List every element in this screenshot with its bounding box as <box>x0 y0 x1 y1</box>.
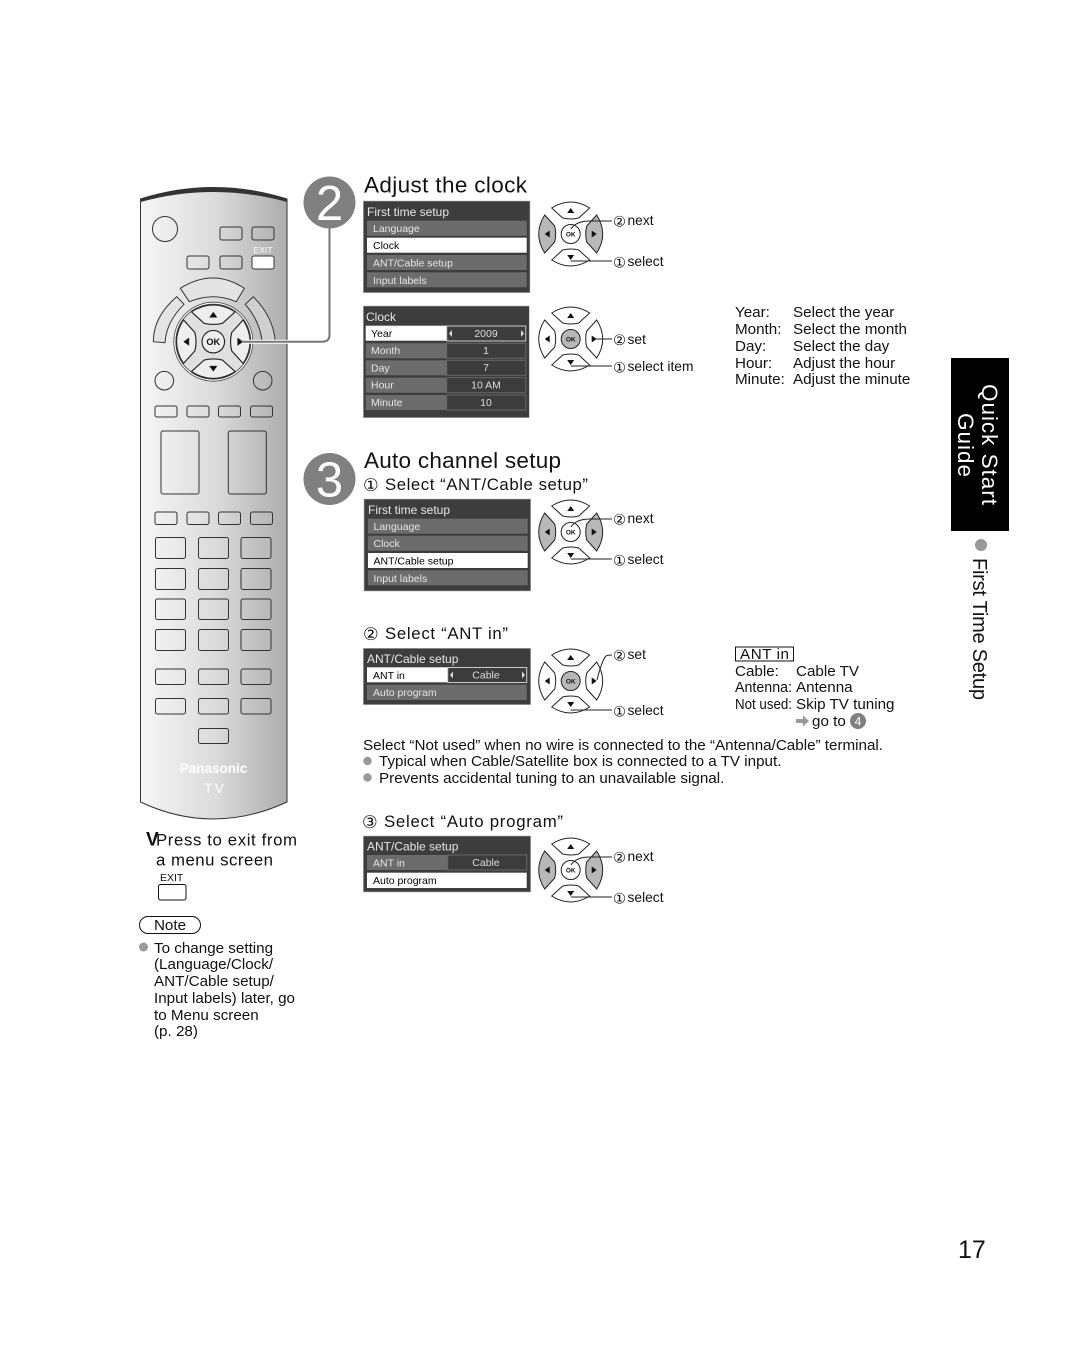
remote brand: Panasonic <box>180 761 248 776</box>
ant in legend: Cable TV <box>796 663 860 680</box>
menu: ant cable setup ant in: Auto program <box>373 687 437 699</box>
ant in legend: go to <box>812 713 846 730</box>
remote pad: set and select 3: ① <box>613 704 626 720</box>
notes on ant in: Select “Not used” when no wire is connected to the “Antenna/Cable” terminal. <box>363 737 883 754</box>
remote control <box>140 188 287 819</box>
connector from step 2 to remote <box>242 226 330 342</box>
ant in legend: Antenna <box>796 679 853 696</box>
menu: clock: 2009 <box>474 328 498 340</box>
menu: clock: 1 <box>483 345 489 357</box>
exit instruction: Press to exit from <box>156 830 297 850</box>
note text <box>139 940 295 1040</box>
clock legend: Month: <box>735 321 781 338</box>
remote pad: set and select item <box>539 307 693 376</box>
menu: first time setup ant cable: Language <box>374 521 420 533</box>
remote pad: next and select: next <box>628 213 654 228</box>
remote pad: set and select item: set <box>628 332 646 347</box>
step badge 2: 2 <box>316 177 343 231</box>
clock legend: Minute: <box>735 371 785 388</box>
substep 2 heading: ② <box>363 625 379 645</box>
menu: clock: Month <box>371 345 400 357</box>
menu: ant cable setup ant in <box>363 648 531 705</box>
menu: clock: Year <box>371 328 393 340</box>
remote pad: set and select item: OK <box>566 336 576 344</box>
clock legend: Year: <box>735 304 770 321</box>
ant in legend: ANT in <box>740 646 789 663</box>
ant in legend: Skip TV tuning <box>796 696 894 713</box>
remote pad: next and select 4: ① <box>613 892 626 908</box>
menu: first time setup clock <box>363 201 530 293</box>
remote pad: set and select item: ① <box>613 360 626 376</box>
remote pad: set and select 3: select <box>628 703 664 718</box>
note text: (Language/Clock/ <box>154 956 274 973</box>
notes on ant in: Typical when Cable/Satellite box is connected to a TV input. <box>379 753 781 770</box>
exit instruction: EXIT <box>160 872 184 884</box>
remote pad: next and select: ② <box>613 214 626 230</box>
remote pad: next and select 2 <box>539 500 664 570</box>
exit instruction: V <box>146 830 159 850</box>
notes on ant in <box>363 737 883 787</box>
menu: ant cable setup auto program: Cable <box>472 857 500 869</box>
menu: clock: Clock <box>366 310 397 324</box>
menu: first time setup ant cable <box>364 499 531 591</box>
menu: ant cable setup ant in: Cable <box>472 670 500 682</box>
clock legend: Hour: <box>735 355 772 372</box>
remote pad: next and select 4 <box>539 838 664 908</box>
clock legend: Adjust the minute <box>793 371 910 388</box>
substep 3 heading: Select “Auto program” <box>384 812 563 831</box>
note pill <box>140 916 200 934</box>
menu: clock: 7 <box>483 362 489 374</box>
menu: first time setup ant cable: ANT/Cable setup <box>374 556 454 568</box>
ant in legend: 4 <box>855 714 862 728</box>
menu: clock <box>363 306 529 418</box>
remote pad: next and select: OK <box>566 232 576 238</box>
colour buttons <box>155 406 272 417</box>
step badge 3 <box>304 453 356 508</box>
remote pad: set and select item: ② <box>613 333 626 349</box>
note text: ANT/Cable setup/ <box>154 973 275 990</box>
step badge 3: 3 <box>316 454 343 508</box>
menu: clock: Hour <box>371 380 394 392</box>
substep 3 heading: ③ <box>362 813 378 833</box>
sidebar label: first time setup: First Time Setup <box>968 558 990 700</box>
page number: 17 <box>958 1236 986 1264</box>
remote pad: next and select 2: select <box>628 552 664 567</box>
remote pad: set and select item: select item <box>628 359 693 374</box>
menu: first time setup clock: Clock <box>373 240 400 252</box>
round buttons <box>155 371 272 390</box>
sidebar tab: quick start guide <box>951 358 1009 531</box>
remote body <box>140 188 287 819</box>
menu: ant cable setup auto program: ANT in <box>373 858 405 870</box>
note text: Input labels) later, go <box>154 990 295 1007</box>
substep 1 heading: Select “ANT/Cable setup” <box>385 475 588 494</box>
remote pad: set and select 3: ② <box>613 648 626 664</box>
sidebar tab: quick start guide: Quick Start <box>977 384 1002 506</box>
top buttons <box>152 216 274 269</box>
volume and channel rockers <box>161 431 266 494</box>
menu: first time setup clock: Language <box>373 223 420 235</box>
heading: adjust the clock: Adjust the clock <box>364 172 528 198</box>
clock legend: Select the day <box>793 338 890 355</box>
clock legend: Select the year <box>793 304 894 321</box>
menu: first time setup ant cable: Clock <box>374 538 401 550</box>
clock legend: Select the month <box>793 321 907 338</box>
remote pad: next and select: ① <box>613 256 626 272</box>
playback buttons <box>155 512 272 524</box>
remote pad: set and select 3: OK <box>566 678 576 686</box>
step badge 2 <box>304 176 356 231</box>
ant in legend: Cable: <box>735 663 779 680</box>
remote pad: next and select: select <box>628 254 664 269</box>
menu: first time setup clock: ANT/Cable setup <box>373 258 453 270</box>
remote pad: next and select 2: ② <box>613 512 626 528</box>
ant in legend <box>735 646 894 730</box>
menu: clock: Day <box>371 362 390 374</box>
remote top band <box>140 188 287 202</box>
clock legend: Day: <box>735 338 766 355</box>
note text: (p. 28) <box>154 1023 198 1040</box>
menu: ant cable setup ant in: ANT in <box>373 670 405 682</box>
menu: ant cable setup auto program: Auto program <box>373 875 437 887</box>
ant in legend: Antenna: <box>735 679 792 696</box>
navigation pad: OK <box>206 337 221 347</box>
remote pad: next and select 2: ① <box>613 554 626 570</box>
remote pad: next and select 4: next <box>628 849 654 864</box>
substep 2 heading: Select “ANT in” <box>385 624 508 643</box>
exit button highlighted: EXIT <box>254 245 272 255</box>
menu: ant cable setup auto program <box>363 836 531 892</box>
menu: clock: Minute <box>371 397 403 409</box>
remote pad: next and select 2: OK <box>566 530 576 536</box>
sidebar tab: quick start guide: Guide <box>953 413 978 477</box>
remote brand: TV <box>204 780 226 796</box>
remote pad: set and select 3: set <box>628 647 646 662</box>
remote pad: next and select 4: OK <box>566 868 576 874</box>
substep 1 heading: ① <box>363 476 379 496</box>
exit button highlighted <box>252 245 274 269</box>
remote pad: next and select 2: next <box>628 511 654 526</box>
remote pad: next and select <box>539 202 664 272</box>
menu: clock: 10 AM <box>471 380 501 392</box>
remote pad: next and select 4: select <box>628 890 664 905</box>
ant in legend: Not used: <box>735 696 792 713</box>
note text: to Menu screen <box>154 1007 259 1024</box>
menu: first time setup ant cable: First time setup <box>368 503 450 517</box>
menu: first time setup ant cable: Input labels <box>374 573 427 585</box>
note text: To change setting <box>154 940 273 957</box>
heading: auto channel setup: Auto channel setup <box>364 448 561 473</box>
menu: first time setup clock: Input labels <box>373 275 427 287</box>
remote brand <box>180 761 248 796</box>
notes on ant in: Prevents accidental tuning to an unavailable signal. <box>379 770 724 787</box>
clock legend <box>735 304 910 388</box>
menu: clock: 10 <box>480 397 492 409</box>
note pill: Note <box>154 917 186 934</box>
lower buttons <box>156 669 271 744</box>
menu: first time setup clock: First time setup <box>367 205 449 219</box>
menu: ant cable setup ant in: ANT/Cable setup <box>367 652 459 666</box>
navigation pad <box>153 278 275 381</box>
number keypad <box>156 538 271 650</box>
remote pad: set and select 3 <box>539 647 664 720</box>
exit instruction <box>146 830 297 900</box>
menu: ant cable setup auto program: ANT/Cable setup <box>367 840 459 854</box>
remote pad: next and select 4: ② <box>613 850 626 866</box>
clock legend: Adjust the hour <box>793 355 895 372</box>
exit instruction: a menu screen <box>156 850 273 870</box>
